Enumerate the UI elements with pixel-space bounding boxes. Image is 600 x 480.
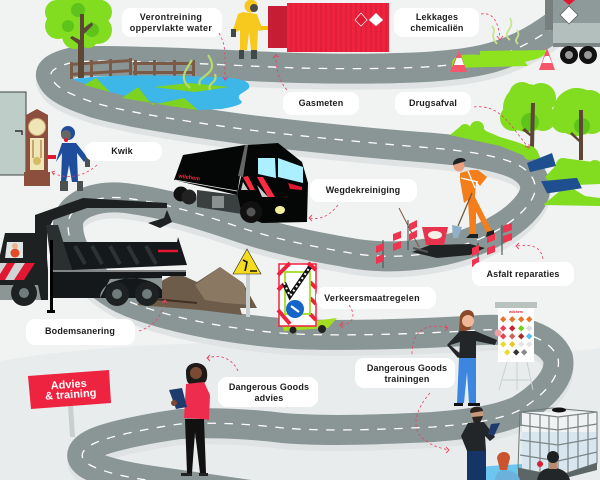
pond with reeds bbox=[72, 55, 249, 110]
person: dark-haired trainee bbox=[537, 451, 570, 480]
drug waste canisters bbox=[527, 153, 582, 195]
label: Verkeersmaatregelen bbox=[316, 287, 436, 309]
label: Drugsafval bbox=[395, 92, 471, 115]
road sweeper truck bbox=[174, 143, 308, 223]
trees right bbox=[500, 82, 600, 160]
dump truck with crane bbox=[0, 198, 187, 313]
arrow: water bbox=[219, 33, 228, 80]
cone right bbox=[539, 48, 555, 70]
arrow: leak bbox=[481, 14, 503, 40]
arrow: asphalt bbox=[516, 243, 543, 259]
asphalt hole with barriers bbox=[376, 208, 512, 270]
cone left bbox=[450, 50, 467, 72]
arrow: drugs waste bbox=[474, 107, 529, 148]
traffic arrow board bbox=[278, 263, 337, 334]
label: Dangerous Goods trainingen bbox=[355, 358, 455, 388]
label: Wegdekreiniging: Wegdekreiniging bbox=[326, 185, 400, 195]
soil pile bbox=[137, 267, 257, 315]
label: Verontreining oppervlakte water: Verontreining bbox=[140, 12, 202, 22]
label: Gasmeten: Gasmeten bbox=[299, 98, 343, 108]
arrow: advice bbox=[207, 355, 238, 371]
arrow: training top bbox=[412, 325, 448, 354]
label: Asfalt reparaties: Asfalt reparaties bbox=[486, 269, 560, 279]
grandfather clock bbox=[24, 109, 50, 186]
label: Gasmeten bbox=[283, 92, 359, 115]
label: Verkeersmaatregelen: Verkeersmaatregelen bbox=[324, 293, 420, 303]
person: man with clipboard bbox=[461, 407, 500, 480]
arrow: sweeper bbox=[309, 205, 338, 221]
warning road sign bbox=[233, 249, 261, 317]
chemical spill pool bbox=[467, 464, 525, 480]
shipping container bbox=[268, 3, 389, 52]
label: Asfalt reparaties bbox=[472, 262, 574, 286]
label: Kwik: Kwik bbox=[111, 146, 134, 156]
person: trainer woman bbox=[447, 310, 502, 406]
person: blue overall with meter bbox=[48, 126, 90, 191]
label: Dangerous Goods advies: advies bbox=[255, 393, 283, 403]
tanker truck bbox=[545, 0, 600, 64]
label: Lekkages chemicaliën: chemicaliën bbox=[410, 23, 464, 33]
arrow: soil bbox=[139, 300, 167, 331]
arrow: mercury bbox=[52, 165, 97, 176]
sign: Advies & training: Advies bbox=[50, 378, 87, 392]
tree: top left bbox=[45, 0, 112, 78]
sign: Advies & training bbox=[28, 370, 111, 437]
chemical spill bbox=[452, 18, 545, 68]
label: Dangerous Goods advies: Dangerous Goods bbox=[229, 382, 309, 392]
door bbox=[0, 92, 26, 175]
person: red-haired trainee bbox=[495, 452, 520, 480]
label: Wegdekreiniging bbox=[310, 179, 417, 202]
label: Dangerous Goods trainingen: Dangerous Goods bbox=[367, 363, 447, 373]
label: Dangerous Goods advies bbox=[218, 377, 318, 407]
person: yellow hazmat suit bbox=[231, 0, 268, 59]
road sweeper truck: wilchem bbox=[177, 173, 200, 183]
label: Lekkages chemicaliën: Lekkages bbox=[416, 12, 458, 22]
bushes bbox=[450, 121, 600, 206]
worker with shovel bbox=[452, 158, 494, 238]
label: Verontreining oppervlakte water bbox=[122, 8, 222, 37]
label: Bodemsanering: Bodemsanering bbox=[45, 326, 115, 336]
label: Bodemsanering bbox=[26, 319, 135, 345]
label: Kwik bbox=[85, 142, 162, 161]
arrow: traffic measures bbox=[340, 305, 353, 328]
label: Dangerous Goods trainingen: trainingen bbox=[384, 374, 430, 384]
flip chart with hazard diamonds bbox=[495, 302, 537, 390]
flip chart with hazard diamonds: wilchem bbox=[508, 310, 523, 314]
label: Lekkages chemicaliën bbox=[394, 8, 479, 37]
fence bbox=[70, 58, 195, 79]
IBC tank bbox=[518, 408, 597, 480]
arrow: gas meter bbox=[273, 55, 287, 90]
person: woman with clipboard bbox=[169, 363, 210, 476]
sign: Advies & training: & training bbox=[45, 387, 97, 403]
label: Verontreining oppervlakte water: oppervlakte water bbox=[130, 23, 212, 33]
label: Drugsafval: Drugsafval bbox=[409, 98, 457, 108]
arrow: training bottom bbox=[416, 393, 449, 453]
